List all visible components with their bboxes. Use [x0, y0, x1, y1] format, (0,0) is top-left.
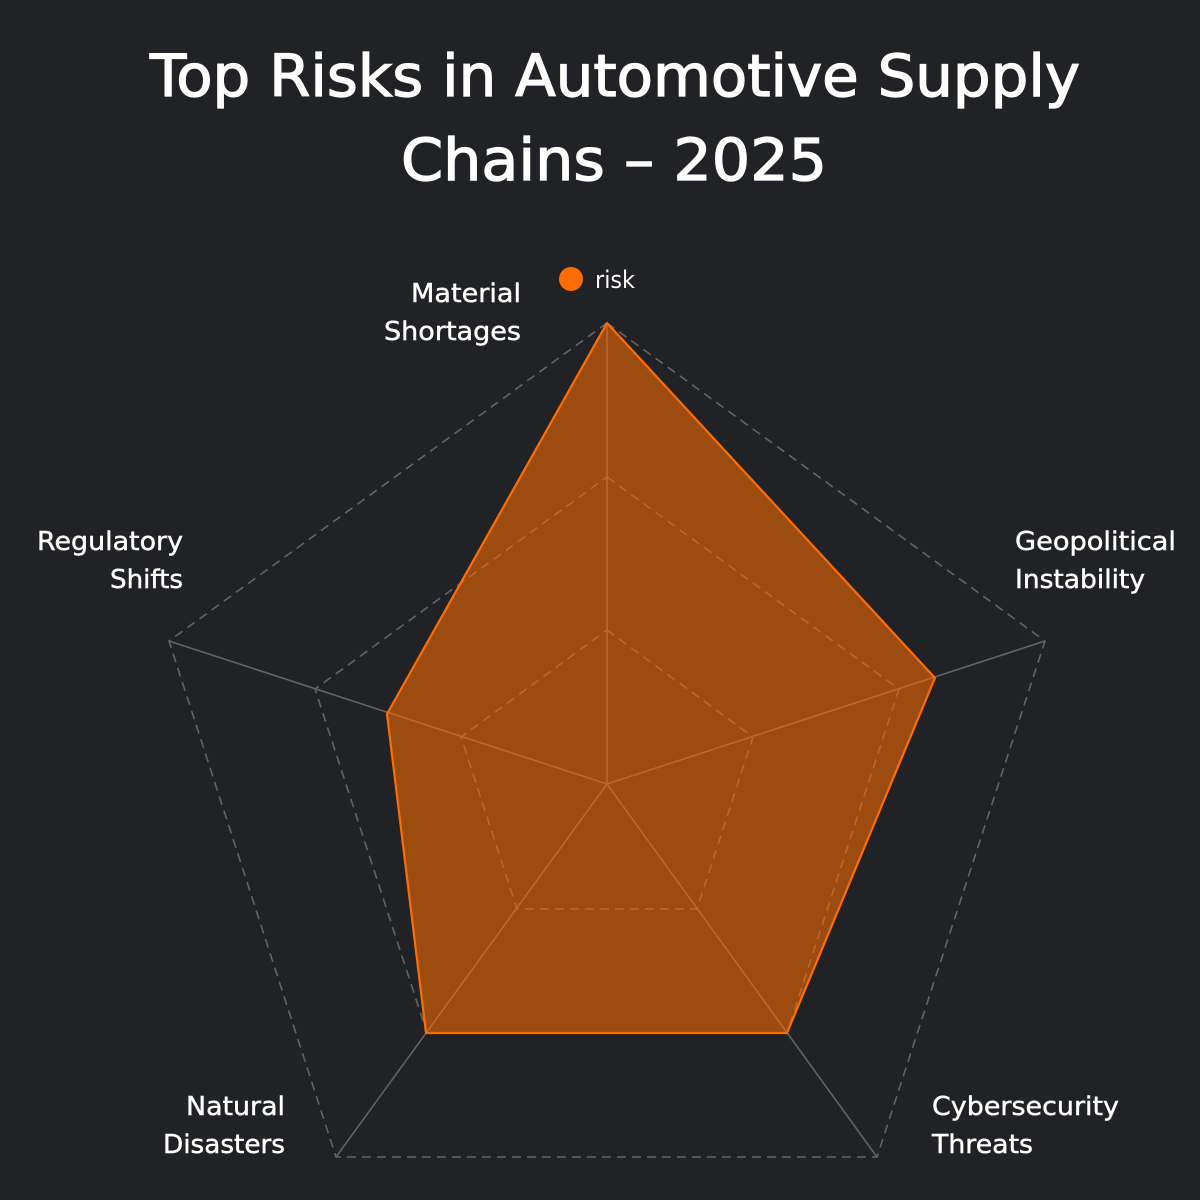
radar grid	[169, 323, 1045, 1157]
axis label: Natural Disasters: Natural	[186, 1092, 285, 1122]
axis label: Regulatory Shifts: Shifts	[110, 565, 183, 595]
axis label: Natural Disasters: Disasters	[163, 1130, 285, 1160]
axis label: Cybersecurity Threats	[931, 1092, 1119, 1160]
axis label: Geopolitical Instability	[1015, 527, 1176, 595]
data polygon: risk	[387, 323, 935, 1033]
axis label: Material Shortages: Shortages	[384, 317, 521, 347]
axis label: Regulatory Shifts: Regulatory	[37, 527, 183, 557]
title	[149, 42, 1080, 194]
axis label: Material Shortages	[384, 279, 521, 347]
axis label: Material Shortages: Material	[411, 279, 521, 309]
axis label: Geopolitical Instability: Geopolitical	[1015, 527, 1176, 557]
legend: risk	[595, 266, 635, 294]
axis label: Regulatory Shifts	[37, 527, 183, 595]
legend	[559, 266, 635, 294]
title: Top Risks in Automotive Supply	[149, 42, 1080, 110]
axis label: Cybersecurity Threats: Threats	[931, 1130, 1033, 1160]
axis label: Natural Disasters	[163, 1092, 285, 1160]
axis label: Geopolitical Instability: Instability	[1015, 565, 1145, 595]
title: Chains – 2025	[401, 126, 827, 194]
axis label: Cybersecurity Threats: Cybersecurity	[932, 1092, 1119, 1122]
